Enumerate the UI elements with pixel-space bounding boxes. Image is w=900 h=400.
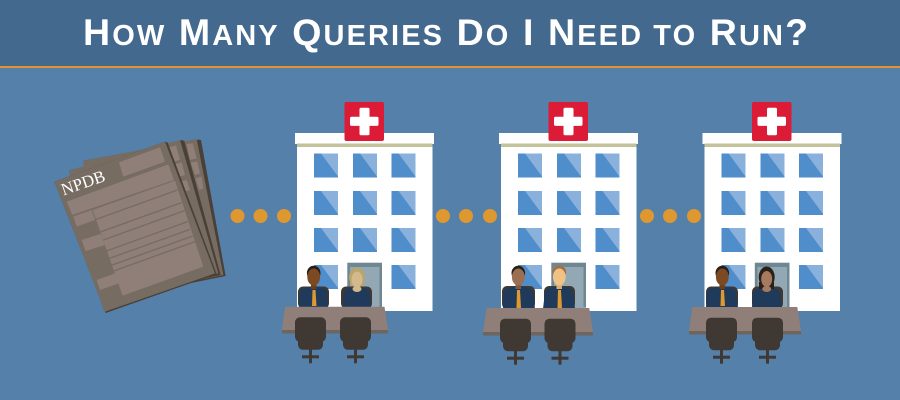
meeting table group 3 bbox=[689, 266, 801, 364]
meeting table group 2 bbox=[483, 266, 593, 365]
title: HOW MANY QUERIES DO I NEED TO RUN? bbox=[83, 11, 808, 53]
dots: connector 1 bbox=[230, 209, 291, 223]
label: NPDB: NPDB bbox=[59, 167, 108, 199]
dots: connector 2 bbox=[436, 209, 497, 223]
hospital 3 bbox=[702, 102, 842, 311]
hospital 2 bbox=[499, 102, 638, 311]
meeting table group 1 bbox=[282, 266, 388, 363]
header band bbox=[0, 0, 900, 68]
hospital 1 bbox=[295, 102, 434, 311]
dots: connector 3 bbox=[640, 209, 701, 223]
icon: stack of NPDB papers bbox=[54, 139, 226, 313]
